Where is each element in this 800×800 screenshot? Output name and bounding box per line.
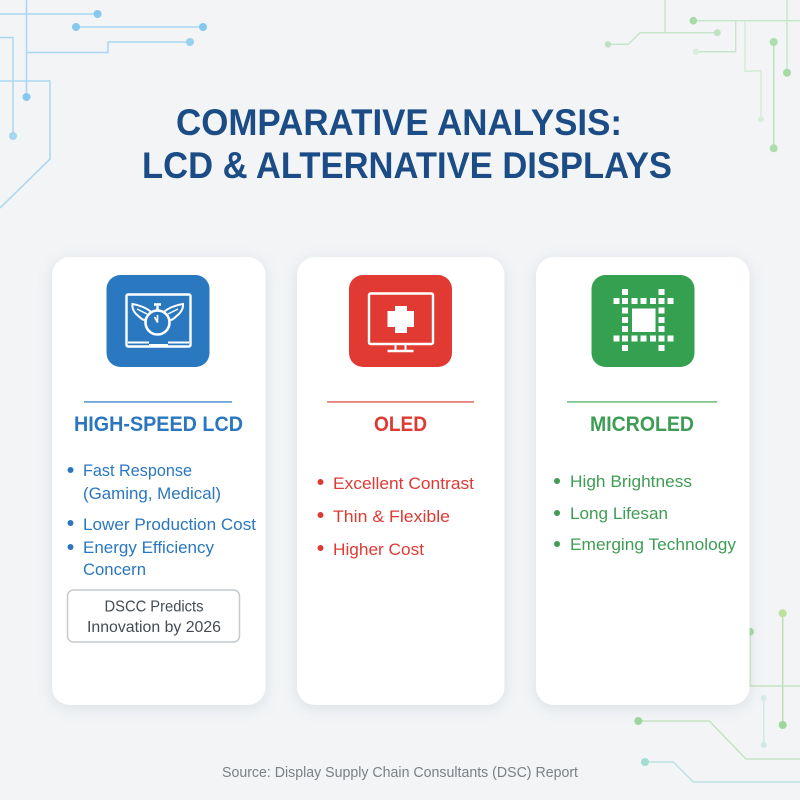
callout: DSCC prediction: DSCC Predicts	[104, 598, 204, 616]
heading: OLED: OLED	[374, 412, 427, 436]
bullet list: LCD features	[68, 461, 256, 579]
title	[142, 102, 672, 186]
divider	[327, 401, 474, 403]
icon: laptop with winged stopwatch	[106, 275, 210, 367]
bullet list: OLED features: Excellent Contrast	[333, 474, 474, 493]
bullet list: LCD features: Concern	[83, 560, 146, 579]
divider	[84, 401, 232, 403]
source note: Source: Display Supply Chain Consultants (DSC) Report	[222, 765, 578, 781]
bullet list: MicroLED features: High Brightness	[570, 472, 692, 491]
decoration: blue circuit lines top left	[0, 0, 207, 208]
title: COMPARATIVE ANALYSIS:	[176, 102, 622, 143]
bullet list: MicroLED features: Long Lifesan	[570, 504, 668, 523]
bullet list: LCD features: Energy Efficiency	[83, 538, 214, 557]
icon: micro LED chip grid	[592, 275, 694, 367]
heading: High-Speed LCD: HIGH-SPEED LCD	[74, 412, 243, 436]
bullet list: LCD features: Fast Response	[83, 461, 192, 480]
bullet list: MicroLED features	[554, 472, 736, 554]
callout: DSCC prediction	[68, 590, 240, 642]
icon: monitor with cross	[349, 275, 452, 367]
bullet list: LCD features: Lower Production Cost	[83, 515, 256, 534]
heading: MicroLED: MICROLED	[590, 412, 694, 436]
callout: DSCC prediction: Innovation by 2026	[87, 619, 221, 636]
decoration: green circuit lines top right	[605, 0, 800, 152]
title: LCD & ALTERNATIVE DISPLAYS	[142, 145, 672, 186]
bullet list: MicroLED features: Emerging Technology	[570, 535, 736, 554]
decoration: green and teal circuit lines bottom right	[634, 609, 800, 782]
bullet list: OLED features: Thin & Flexible	[333, 507, 450, 526]
panel: High-Speed LCD	[52, 257, 266, 705]
bullet list: LCD features: (Gaming, Medical)	[83, 484, 221, 503]
panel: OLED	[297, 257, 504, 705]
bullet list: OLED features: Higher Cost	[333, 540, 424, 559]
panel: MicroLED	[536, 257, 750, 705]
bullet list: OLED features	[318, 474, 474, 559]
divider	[567, 401, 717, 403]
